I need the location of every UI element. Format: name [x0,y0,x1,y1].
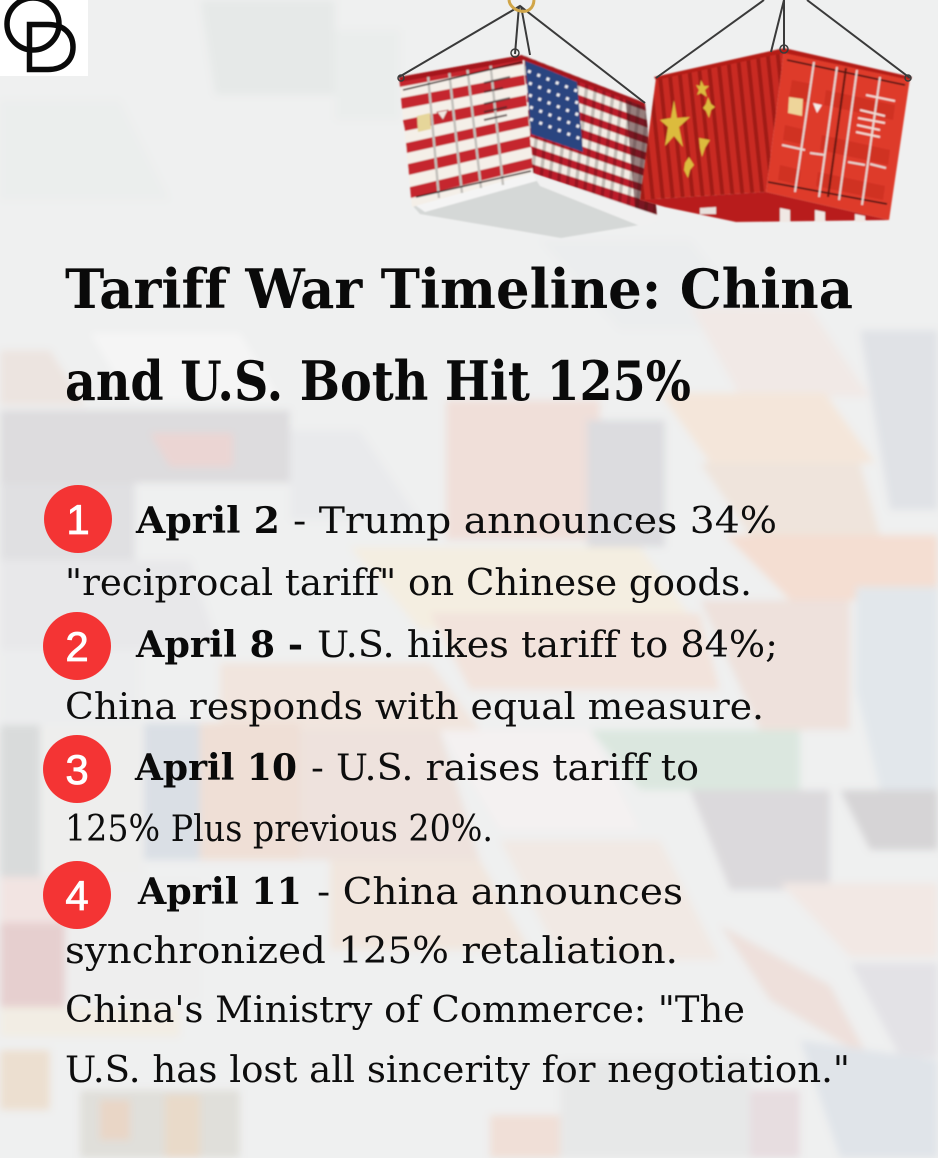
timeline item 2 [43,612,778,728]
illustration: U.S. flag shipping container [399,50,660,238]
left face [640,50,784,200]
timeline item 3: 125% Plus previous 20%. [65,809,493,850]
canton [525,60,583,152]
number badge 1: 1 [66,496,90,543]
timeline item 2: China responds with equal measure. [65,687,764,728]
crane slings and hooks [398,0,911,103]
right face with flag [520,50,660,220]
container underside [412,175,657,238]
underside [640,192,889,222]
timeline item 4: China's Ministry of Commerce: "The [65,990,745,1031]
timeline item 3: - U.S. raises tariff to [311,748,699,789]
timeline item 4: U.S. has lost all sincerity for negotiation." [65,1050,850,1091]
timeline item 4: April 11 [137,871,302,913]
number badge 1 [44,485,112,553]
logo: OD monogram on white [0,0,88,76]
number badge 4: 4 [65,872,89,919]
title: and U.S. Both Hit 125% [65,349,691,413]
number badge 2 [43,612,111,680]
timeline item 4: - China announces [317,872,683,913]
number badge 4 [43,861,111,929]
illustration: China flag shipping container [630,45,912,222]
title [65,257,853,413]
timeline item 2: U.S. hikes tariff to 84%; [317,625,778,666]
door bars and details [428,60,503,198]
timeline item 4: synchronized 125% retaliation. [65,931,678,972]
timeline item 4 [43,861,850,1091]
timeline item 1: April 2 [135,500,280,542]
timeline item 1: - Trump announces 34% [293,501,777,542]
timeline item 2: April 8 - [135,624,303,666]
flag stars [660,80,715,178]
left face with stripes [399,55,533,207]
timeline item 3: April 10 [134,747,297,789]
timeline item 1 [44,485,777,604]
number badge 2: 2 [65,623,89,670]
timeline item 3 [43,735,699,850]
title: Tariff War Timeline: China [65,257,853,321]
number badge 3 [43,735,111,803]
timeline item 1: "reciprocal tariff" on Chinese goods. [65,563,752,604]
right face [766,50,910,220]
number badge 3: 3 [65,746,89,793]
